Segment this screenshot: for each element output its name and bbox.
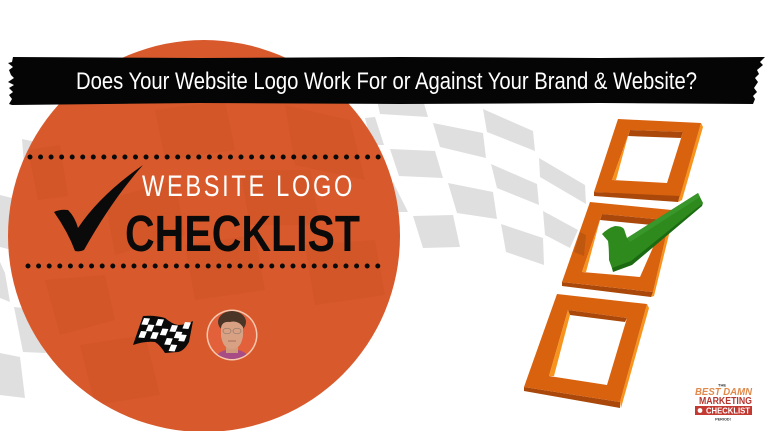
background checkered flag pattern xyxy=(0,100,586,398)
shirt xyxy=(218,350,246,359)
hair xyxy=(218,311,246,329)
glasses xyxy=(223,328,241,334)
logo: the best damn marketing checklist: BEST DAMN xyxy=(695,387,753,398)
checkbox 3 xyxy=(524,294,649,408)
heading: checklist: CHECKLIST xyxy=(125,205,360,262)
logo: the best damn marketing checklist: MARKETING xyxy=(699,396,752,407)
mouth xyxy=(228,340,236,342)
icon: large black check mark xyxy=(54,165,143,251)
orange circle panel xyxy=(8,40,400,431)
face xyxy=(221,322,243,349)
logo: the best damn marketing checklist: CHECKLIST xyxy=(706,406,750,416)
logo: the best damn marketing checklist xyxy=(695,382,753,422)
black brush banner xyxy=(8,57,765,105)
top dotted line xyxy=(30,154,379,160)
subtle checker texture inside circle xyxy=(94,398,102,404)
icon: green check mark xyxy=(602,193,703,272)
neck xyxy=(226,347,238,353)
heading: website logo: WEBSITE LOGO xyxy=(142,169,352,203)
logo: the best damn marketing checklist: THE xyxy=(718,382,726,388)
icon: checkered flag xyxy=(133,316,193,353)
checkbox 1 xyxy=(594,119,703,202)
portrait: presenter photo in circle xyxy=(206,310,258,362)
bottom dotted line xyxy=(28,264,379,268)
logo: the best damn marketing checklist: PERIOD! xyxy=(715,418,731,422)
checkbox 2 xyxy=(562,202,674,297)
